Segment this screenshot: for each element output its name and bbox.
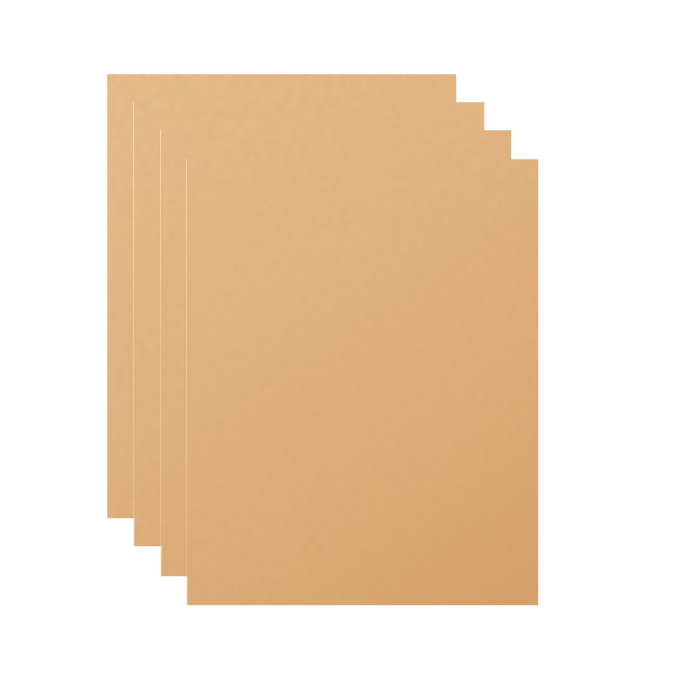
- paper grain texture: [304, 74, 538, 606]
- left edges of the overlapping sheets: [133, 102, 187, 605]
- illustration: stack of four kraft paper sheets: [107, 74, 538, 606]
- stack of sheets: stepped outline: [107, 74, 538, 606]
